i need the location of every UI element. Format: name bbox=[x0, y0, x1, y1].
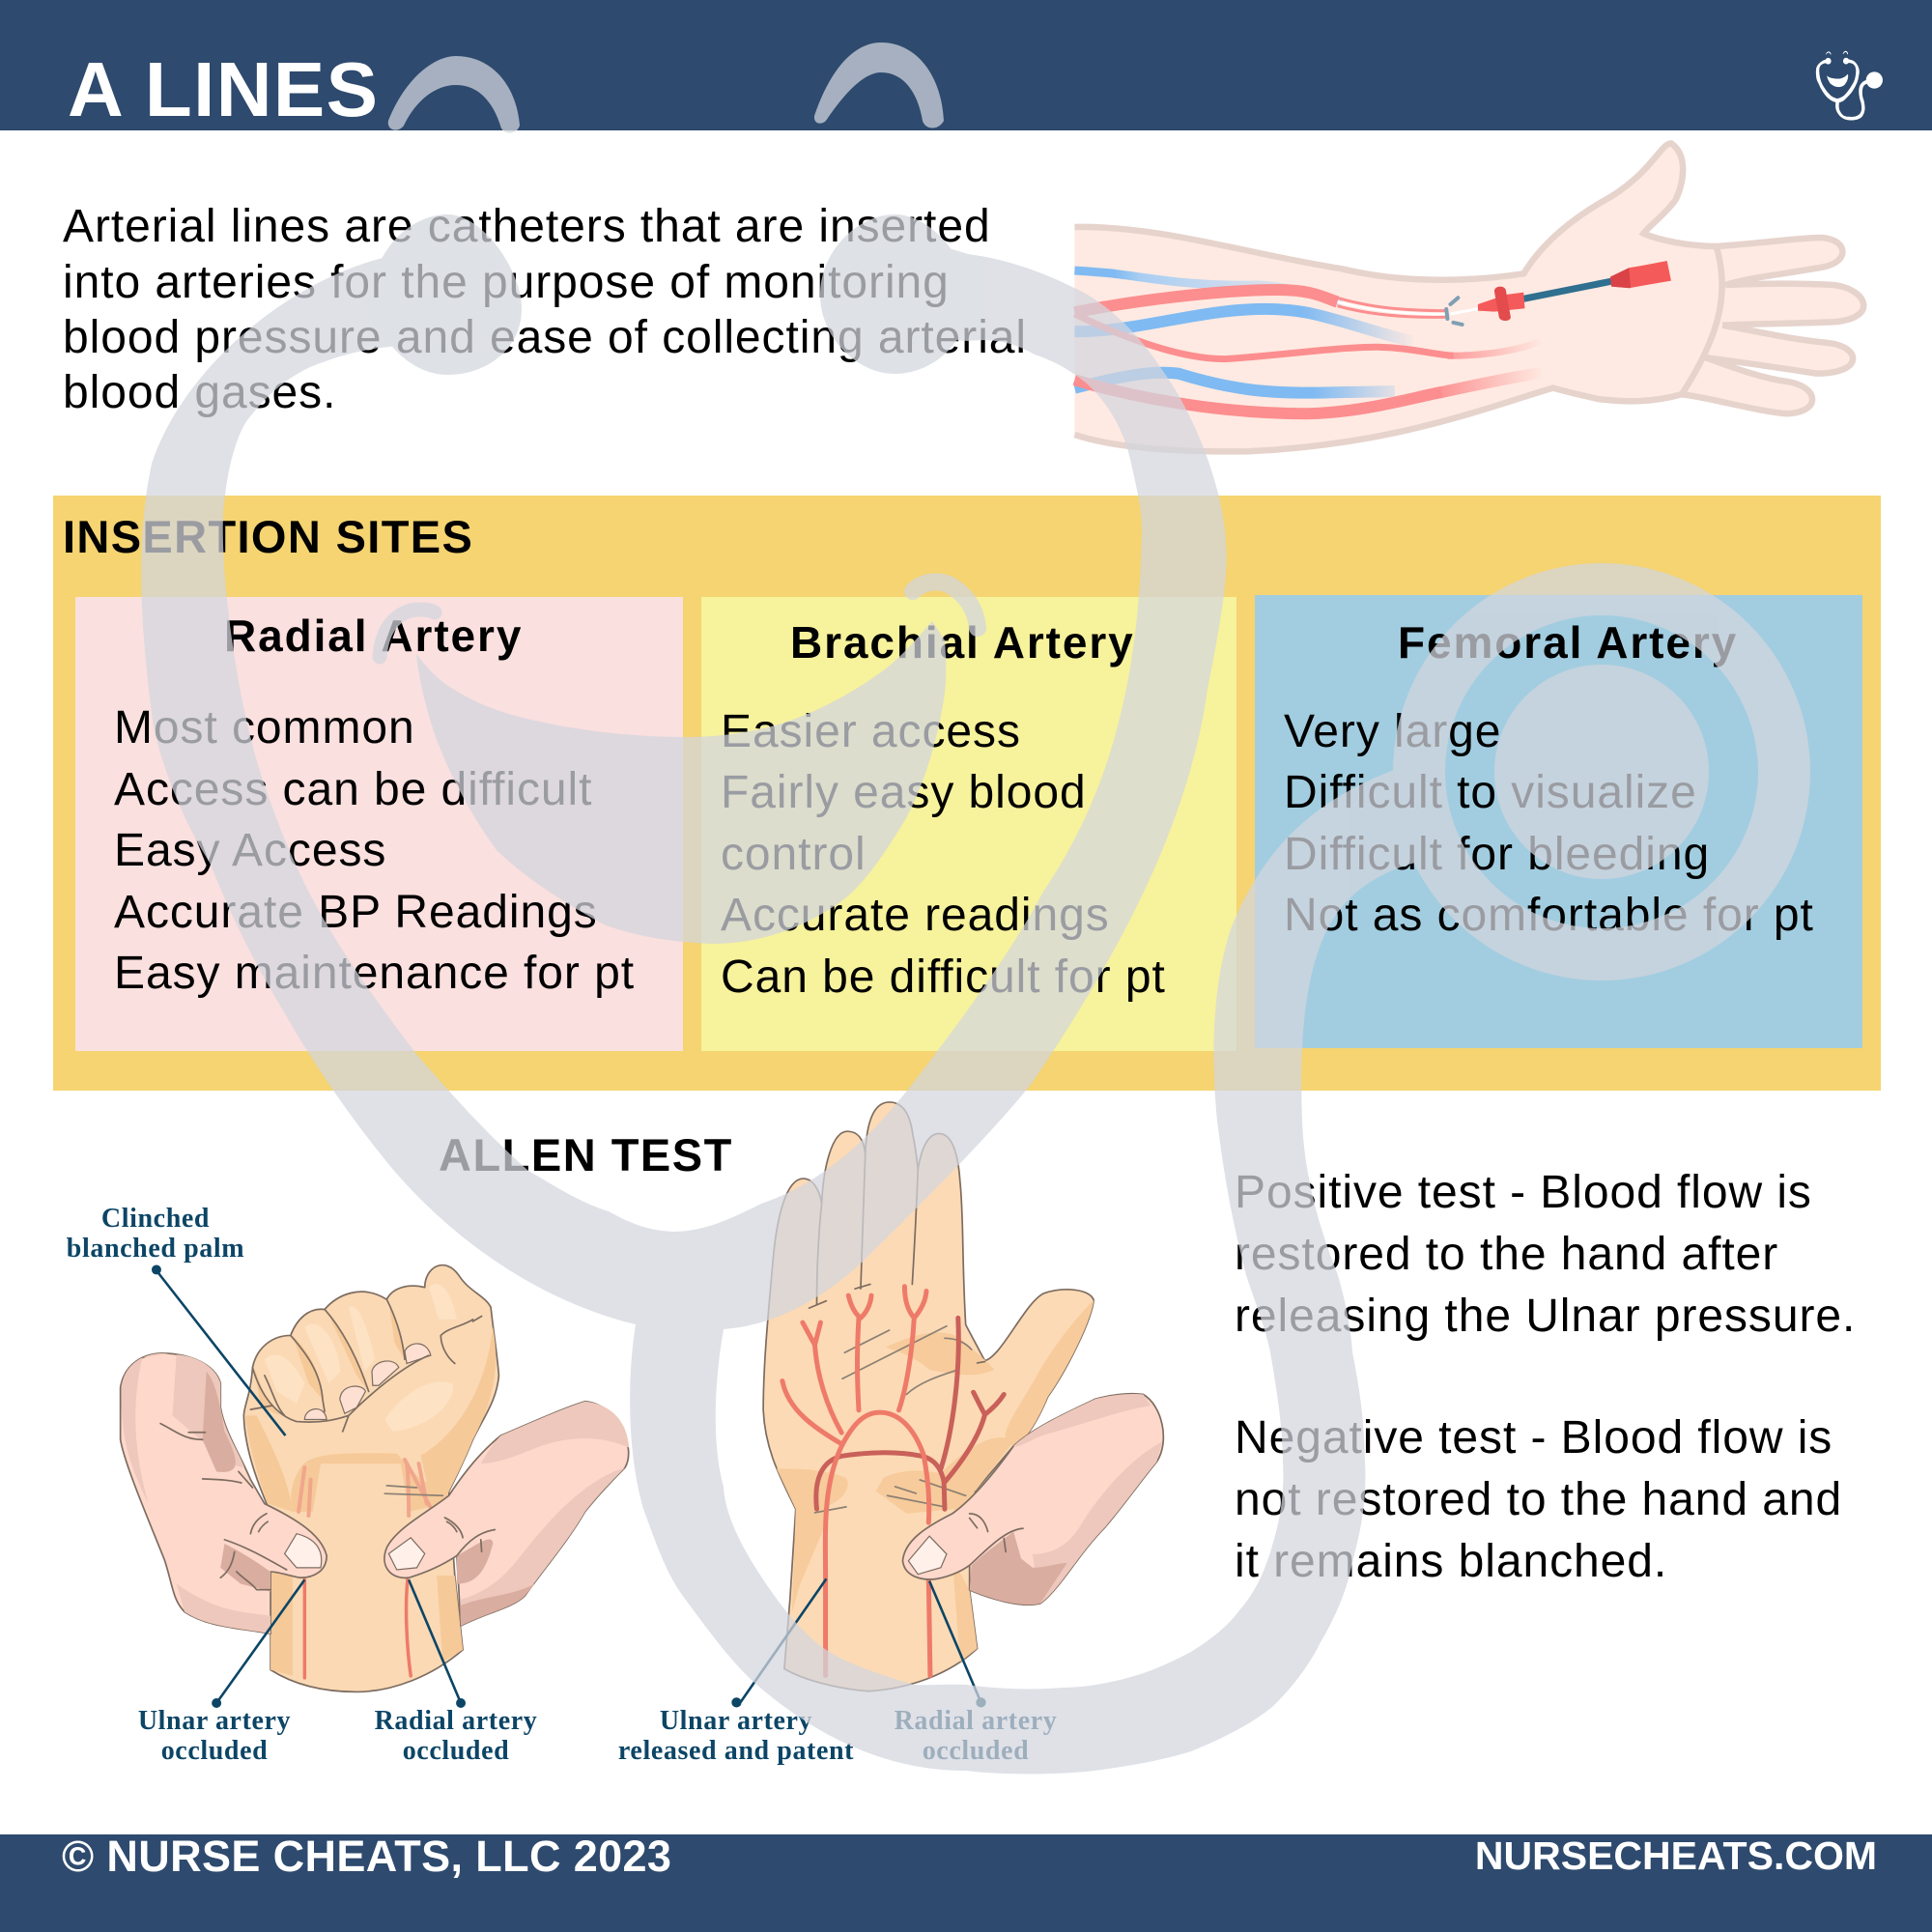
catheter bbox=[1446, 261, 1671, 325]
arteries bbox=[1074, 290, 1541, 413]
panel: brachial artery: Fairly easy blood bbox=[721, 767, 1087, 818]
allen test explanation: it remains blanched. bbox=[1235, 1536, 1667, 1587]
footer copyright: © NURSE CHEATS, LLC 2023 bbox=[62, 1832, 671, 1881]
header bar bbox=[0, 0, 1932, 130]
panel: femoral artery: Femoral Artery bbox=[1398, 617, 1738, 668]
labels: open hand illustration: Ulnar artery bbox=[660, 1706, 812, 1736]
labels: fist illustration: occluded bbox=[403, 1736, 509, 1766]
intro paragraph: blood pressure and ease of collecting arterial bbox=[63, 312, 1027, 363]
labels: fist illustration: Clinched bbox=[101, 1204, 210, 1234]
panel: radial artery: Easy maintenance for pt bbox=[114, 948, 635, 999]
panel: brachial artery bbox=[701, 597, 1236, 1051]
helper hand left bbox=[121, 1353, 327, 1634]
helper hand right bbox=[384, 1402, 629, 1626]
footer bar bbox=[0, 1834, 1932, 1932]
intro paragraph: into arteries for the purpose of monitoring bbox=[63, 257, 950, 308]
illustration: arm with arterial line bbox=[1074, 143, 1863, 451]
heading: insertion sites: INSERTION SITES bbox=[63, 511, 473, 562]
allen test explanation: releasing the Ulnar pressure. bbox=[1235, 1291, 1856, 1342]
labels: fist illustration: Ulnar artery bbox=[138, 1706, 291, 1736]
icon: stethoscope logo bbox=[1816, 51, 1883, 120]
labels: open hand illustration bbox=[618, 1706, 1057, 1766]
labels: open hand illustration: Radial artery bbox=[895, 1706, 1057, 1736]
callout leaders bbox=[156, 1270, 461, 1703]
panel: brachial artery: Can be difficult for pt bbox=[721, 952, 1166, 1003]
intro paragraph bbox=[63, 201, 1027, 418]
labels: fist illustration: blanched palm bbox=[67, 1234, 244, 1264]
panel: radial artery: Easy Access bbox=[114, 825, 386, 876]
illustration: clenched fist with both arteries occluded bbox=[121, 1264, 629, 1708]
panel: radial artery bbox=[75, 597, 683, 1051]
panel: femoral artery: Difficult for bleeding bbox=[1284, 829, 1710, 880]
panel: radial artery: Most common bbox=[114, 702, 415, 753]
palm arteries bbox=[816, 1318, 1004, 1509]
illustration: open hand with ulnar artery released bbox=[731, 1102, 1163, 1708]
callout leaders bbox=[740, 1578, 981, 1702]
allen test explanation: Positive test - Blood flow is bbox=[1235, 1167, 1812, 1218]
labels: fist illustration: occluded bbox=[161, 1736, 268, 1766]
panel: femoral artery: Difficult to visualize bbox=[1284, 767, 1697, 818]
title: A LINES bbox=[68, 46, 379, 132]
panel: brachial artery: Accurate readings bbox=[721, 890, 1110, 941]
allen test explanation: restored to the hand after bbox=[1235, 1229, 1778, 1280]
intro paragraph: Arterial lines are catheters that are inserted bbox=[63, 201, 991, 252]
panel: radial artery: Accurate BP Readings bbox=[114, 887, 598, 938]
panel: femoral artery: Very large bbox=[1284, 706, 1501, 757]
footer website: NURSECHEATS.COM bbox=[1475, 1833, 1877, 1878]
panel: insertion sites bbox=[53, 496, 1881, 1091]
helper hand bbox=[902, 1394, 1163, 1605]
allen test explanation bbox=[1235, 1167, 1856, 1587]
panel: femoral artery bbox=[1255, 595, 1862, 1048]
intro paragraph: blood gases. bbox=[63, 367, 336, 418]
labels: fist illustration: Radial artery bbox=[375, 1706, 537, 1736]
panel: radial artery: Access can be difficult bbox=[114, 764, 592, 815]
panel: femoral artery: Not as comfortable for pt bbox=[1284, 890, 1814, 941]
labels: open hand illustration: released and patent bbox=[618, 1736, 854, 1766]
heading: allen test: ALLEN TEST bbox=[439, 1129, 733, 1180]
veins bbox=[1074, 270, 1412, 393]
panel: brachial artery: control bbox=[721, 829, 867, 880]
labels: open hand illustration: occluded bbox=[923, 1736, 1029, 1766]
watermark: stethoscope logo bbox=[141, 43, 1810, 1774]
allen test explanation: not restored to the hand and bbox=[1235, 1474, 1842, 1525]
panel: brachial artery: Brachial Artery bbox=[790, 617, 1135, 668]
labels: fist illustration bbox=[67, 1204, 537, 1766]
allen test explanation: Negative test - Blood flow is bbox=[1235, 1412, 1833, 1463]
panel: brachial artery: Easier access bbox=[721, 706, 1021, 757]
panel: radial artery: Radial Artery bbox=[224, 611, 523, 661]
